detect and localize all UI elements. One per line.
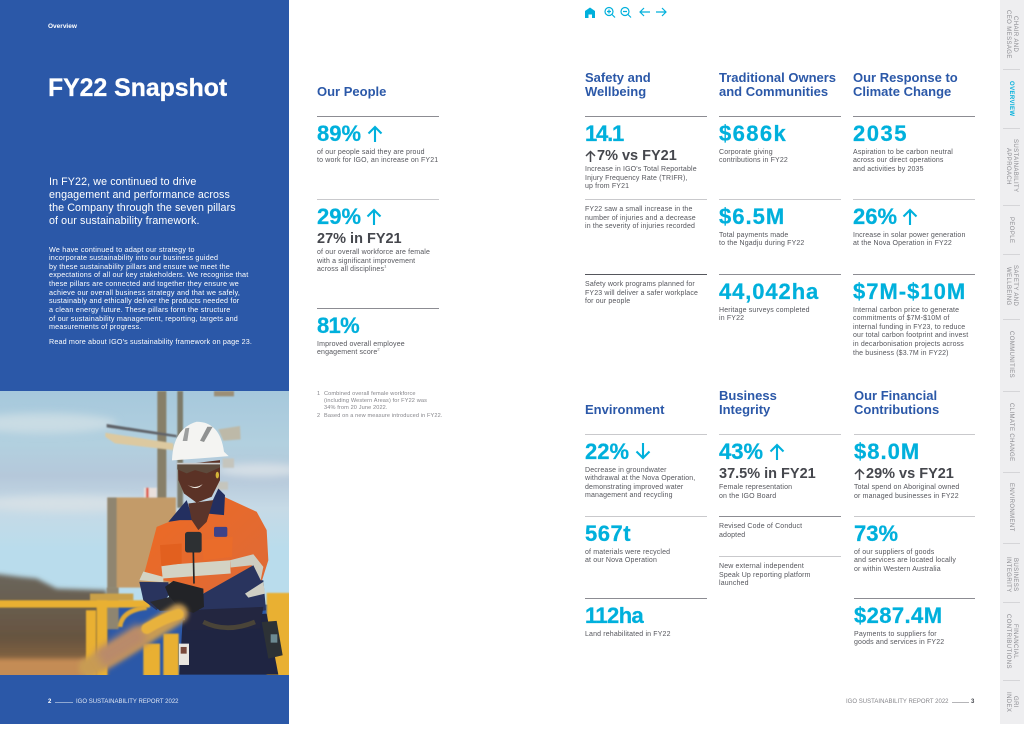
toolbar icons: home, zoom in, zoom out, back, forward (585, 6, 667, 18)
stat: proud to work: 89% (317, 121, 361, 146)
stat: recycled materials (585, 516, 707, 566)
body text: a clean energy future. These pillars form the structure (49, 305, 230, 314)
navy sleeves (139, 582, 170, 610)
face (178, 460, 220, 503)
text: safety programs note: FY23 will deliver a safer workplace (585, 290, 698, 297)
tab: business integrity: INTEGRITY (1005, 557, 1011, 593)
page reference text: Read more about IGO's sustainability framework on page 23. (49, 337, 252, 346)
footer left: IGO SUSTAINABILITY REPORT 2022 (76, 699, 179, 705)
tab: GRI index: INDEX (1005, 692, 1011, 712)
column: climate change heading: Our Response to (853, 70, 958, 85)
column: financial contributions heading: Contributions (854, 402, 939, 417)
stat: female board representation: Female representation (719, 484, 792, 491)
stat: groundwater: withdrawal at the Nova Operation, (585, 475, 695, 482)
body text: these pillars are connected and together they ensure we (49, 279, 239, 288)
intro text: engagement and performance across (49, 189, 230, 201)
stat: solar power: Increase in solar power generation (853, 232, 966, 239)
stat: TRIFR: 7% vs FY21 (597, 148, 677, 164)
hi-vis stripes (161, 560, 231, 579)
body text (49, 244, 248, 331)
trousers (179, 614, 278, 675)
text: speak up platform: New external independent (719, 563, 804, 570)
column: business integrity heading (719, 388, 777, 417)
tab: climate change: CLIMATE CHANGE (1008, 403, 1014, 461)
stat: carbon price: in decarbonisation projects across (853, 341, 964, 348)
column: business integrity heading: Integrity (719, 402, 770, 417)
stat: female workforce: across all disciplines1 (317, 264, 386, 273)
tab: financial contributions: FINANCIAL (1012, 624, 1018, 658)
column: safety and wellbeing heading (585, 70, 651, 99)
stat: solar power: 26% (853, 204, 897, 229)
stat: groundwater (585, 434, 707, 501)
stat: TRIFR (585, 116, 707, 192)
stat: proud to work (317, 116, 439, 166)
stat: corporate giving: contributions in FY22 (719, 157, 788, 164)
tab: chair and CEO message: CHAIR AND (1012, 16, 1018, 52)
text: safety programs note: Safety work programs planned for (585, 281, 695, 288)
stat: supplier payments: Payments to suppliers for (854, 631, 937, 638)
torso shirt (143, 497, 268, 610)
panel: side navigation tabs (1000, 0, 1024, 724)
stat: solar power (853, 199, 975, 249)
stat: local suppliers: 73% (854, 521, 898, 546)
tab: GRI index: GRI (1012, 696, 1018, 708)
pocket and logo details (160, 544, 182, 566)
body text: by these sustainability pillars and ensure we meet the (49, 262, 230, 271)
stat: carbon neutral: and activities by 2035 (853, 166, 924, 173)
id badge and radio (179, 644, 189, 665)
intro text: the Company through the seven pillars (49, 202, 236, 214)
text: injuries note: number of injuries and a decrease (585, 215, 696, 222)
text: speak up platform (719, 556, 841, 589)
photo: worker in hard hat and hi-vis shirt (0, 391, 289, 675)
gloves (165, 581, 204, 613)
foreground blurred rail (88, 614, 178, 668)
text: injuries note: FY22 saw a small increase in the (585, 206, 693, 213)
stat: local suppliers (854, 516, 975, 574)
stat: carbon price: the business ($3.7M in FY22) (853, 350, 949, 357)
text: safety programs note: for our people (585, 298, 630, 305)
tab: safety and wellbeing: WELLBEING (1005, 267, 1011, 305)
tab: sustainability approach: SUSTAINABILITY (1012, 139, 1018, 193)
stat: carbon neutral (853, 116, 975, 174)
column: business integrity heading: Business (719, 388, 777, 403)
stat: female workforce: with a significant improvement (317, 258, 415, 265)
stat: carbon neutral: Aspiration to be carbon neutral (853, 149, 953, 156)
stat: female board representation: 37.5% in FY21 (719, 466, 816, 482)
stat: TRIFR: 14.1 (585, 121, 623, 146)
stat: female board representation: on the IGO Board (719, 493, 776, 500)
tab: chair and CEO message: CEO MESSAGE (1005, 10, 1011, 58)
stat: local suppliers: or within Western Australia (854, 566, 941, 573)
stat: female workforce: 29% (317, 204, 361, 229)
tab: sustainability approach: APPROACH (1005, 148, 1011, 184)
stat: Ngadju payments: to the Ngadju during FY22 (719, 240, 804, 247)
tab: safety and wellbeing: SAFETY AND (1012, 265, 1018, 307)
stat: Aboriginal businesses spend: $8.0M (854, 439, 920, 464)
hard hat (172, 422, 229, 460)
stat: Aboriginal businesses spend: or managed businesses in FY22 (854, 493, 959, 500)
footnotes: (including Western Areas) for FY22 was (324, 398, 427, 404)
column: safety and wellbeing heading: Safety and (585, 70, 651, 85)
stat: local suppliers: of our suppliers of goods (854, 549, 934, 556)
stat: heritage surveys: 44,042ha (719, 279, 819, 304)
body text: of our sustainability management, reporting, targets and (49, 314, 238, 323)
tab: sustainability approach (1005, 139, 1018, 193)
column: financial contributions heading: Our Financial (854, 388, 937, 403)
stat: proud to work: of our people said they are proud (317, 149, 425, 156)
footer left: 2 (48, 699, 51, 705)
stat: carbon price: our total carbon footprint and invest (853, 332, 968, 339)
stat: recycled materials: 567t (585, 521, 631, 546)
tab: financial contributions: CONTRIBUTIONS (1005, 614, 1011, 668)
stat: engagement score (317, 308, 439, 358)
column: traditional owners heading: Traditional Owners (719, 70, 836, 85)
stat: recycled materials: of materials were recycled (585, 549, 670, 556)
stat: recycled materials: at our Nova Operation (585, 557, 657, 564)
stat: groundwater: management and recycling (585, 492, 673, 499)
stat: engagement score: 81% (317, 313, 359, 338)
intro text (49, 176, 236, 227)
column: traditional owners heading: and Communities (719, 84, 828, 99)
stat: groundwater: Decrease in groundwater (585, 467, 667, 474)
stat: heritage surveys: Heritage surveys completed (719, 307, 810, 314)
tab: overview active: OVERVIEW (1008, 81, 1014, 117)
tab: communities: COMMUNITIES (1008, 331, 1014, 379)
text: code of conduct: adopted (719, 532, 745, 539)
stat: groundwater: demonstrating improved water (585, 484, 683, 491)
stat: carbon price: internal funding in FY23, to reduce (853, 324, 965, 331)
stat: TRIFR: Increase in IGO's Total Reportable (585, 166, 697, 173)
text: safety programs note (585, 274, 707, 307)
stat: groundwater: 22% (585, 439, 629, 464)
stat: supplier payments (854, 598, 975, 648)
footnotes: Based on a new measure introduced in FY22. (324, 413, 443, 419)
stat: supplier payments: goods and services in FY22 (854, 639, 944, 646)
footer right: 3 (971, 699, 974, 705)
stat: carbon price (853, 274, 975, 358)
stat: female workforce: of our overall workforce are female (317, 249, 430, 256)
stat: proud to work: to work for IGO, an increase on FY21 (317, 157, 438, 164)
section label: Overview (48, 23, 77, 30)
footnotes (317, 391, 443, 419)
tab: chair and CEO message (1005, 10, 1018, 58)
stat: Ngadju payments: Total payments made (719, 232, 788, 239)
intro text: of our sustainability framework. (49, 215, 200, 227)
stat: heritage surveys (719, 274, 841, 324)
text: code of conduct: Revised Code of Conduct (719, 523, 802, 530)
body text: measurements of progress. (49, 322, 142, 331)
stat: female workforce: 27% in FY21 (317, 230, 402, 246)
stat: corporate giving: $686k (719, 121, 787, 146)
intro text: In FY22, we continued to drive (49, 176, 196, 188)
text: injuries note: in the severity of injuries recorded (585, 223, 695, 230)
stat: corporate giving (719, 116, 841, 166)
stat: engagement score: engagement score2 (317, 347, 380, 356)
stat: corporate giving: Corporate giving (719, 149, 773, 156)
body text: achieve our overall business strategy and that we safely, (49, 288, 240, 297)
stat: carbon neutral: 2035 (853, 121, 908, 146)
column: climate change heading: Climate Change (853, 84, 951, 99)
stat: heritage surveys: in FY22 (719, 315, 744, 322)
tab: business integrity (1005, 557, 1018, 593)
stat: carbon price: commitments of $7M-$10M of (853, 315, 950, 322)
body text: sustainably and ethically deliver the products needed for (49, 296, 239, 305)
stat: female board representation: 43% (719, 439, 763, 464)
column: safety and wellbeing heading: Wellbeing (585, 84, 646, 99)
stat: Ngadju payments: $6.5M (719, 204, 785, 229)
tab: environment: ENVIRONMENT (1008, 483, 1014, 531)
panel: blue left page (0, 0, 289, 724)
tab: business integrity: BUSINESS (1012, 558, 1018, 592)
stat: female board representation (719, 434, 841, 501)
column: traditional owners heading (719, 70, 836, 99)
footnotes: 34% from 20 June 2022. (324, 405, 388, 411)
stat: TRIFR: Injury Frequency Rate (TRIFR), (585, 175, 688, 182)
footnotes: 2 (317, 413, 320, 419)
column: financial contributions heading (854, 388, 939, 417)
stat: land rehabilitated: 112ha (585, 603, 643, 628)
panel: our people heading: Our People (317, 84, 386, 99)
stat: land rehabilitated: Land rehabilitated in FY22 (585, 631, 671, 638)
text: speak up platform: launched (719, 580, 749, 587)
tab: GRI index (1005, 692, 1018, 712)
column: environment heading: Environment (585, 402, 664, 417)
stat: solar power: at the Nova Operation in FY22 (853, 240, 952, 247)
title: FY22 Snapshot (48, 74, 227, 102)
footnotes: Combined overall female workforce (324, 391, 416, 397)
footer right: IGO SUSTAINABILITY REPORT 2022 (846, 699, 949, 705)
radio microphone (185, 532, 202, 553)
tab: people: PEOPLE (1008, 217, 1014, 243)
column: climate change heading (853, 70, 958, 99)
stat: land rehabilitated (585, 598, 707, 639)
stat: Aboriginal businesses spend: Total spend on Aboriginal owned (854, 484, 959, 491)
stat: TRIFR: up from FY21 (585, 183, 629, 190)
stat: carbon neutral: across our direct operations (853, 157, 944, 164)
body text: incorporate sustainability into our business guided (49, 253, 218, 262)
text: speak up platform: Speak Up reporting platform (719, 572, 811, 579)
body text: expectations of all our key stakeholders. We recognise that (49, 270, 248, 279)
stat: carbon price: Internal carbon price to generate (853, 307, 959, 314)
stat: Aboriginal businesses spend: 29% vs FY21 (866, 466, 954, 482)
stat: carbon price: $7M-$10M (853, 279, 966, 304)
stat: local suppliers: and services are located locally (854, 557, 956, 564)
tab: financial contributions (1005, 614, 1018, 668)
text: code of conduct (719, 516, 841, 540)
stat: engagement score: Improved overall employee (317, 341, 405, 348)
stat: female workforce (317, 199, 439, 275)
tab: safety and wellbeing (1005, 265, 1018, 307)
collar and neck (168, 500, 193, 522)
body text: We have continued to adapt our strategy to (49, 244, 195, 254)
text: injuries note (585, 199, 707, 232)
footnotes: 1 (317, 391, 320, 397)
stat: supplier payments: $287.4M (854, 603, 942, 628)
stat: Ngadju payments (719, 199, 841, 249)
stat: Aboriginal businesses spend (854, 434, 975, 501)
